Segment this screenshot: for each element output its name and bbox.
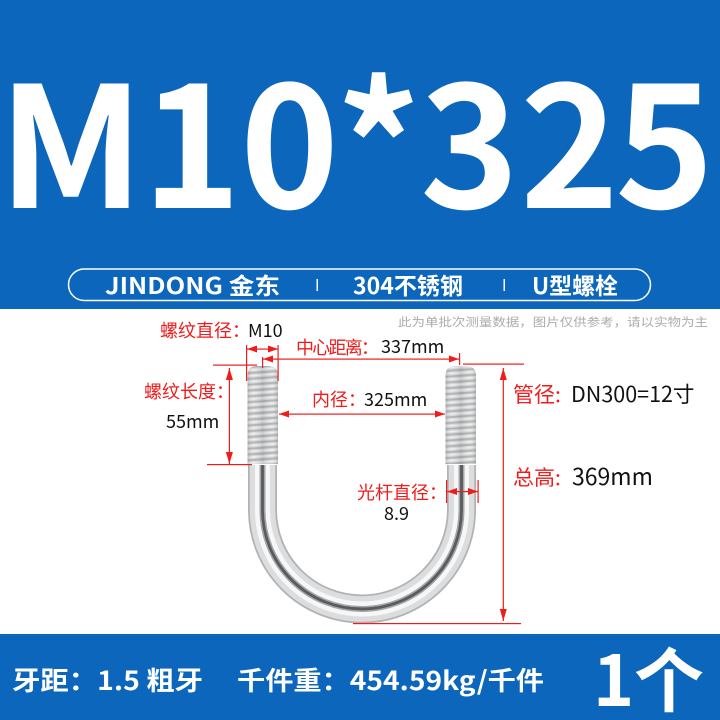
material text: 304不锈钢: [353, 267, 463, 301]
panel: brand pill bar: [68, 267, 650, 301]
title: model size: 10*325: [142, 14, 714, 257]
product type text: U型螺栓: [532, 267, 618, 301]
thread length dimension: [207, 364, 257, 465]
product image: U-bolt: [248, 366, 476, 609]
label: center distance: 中心距离：: [296, 334, 379, 360]
thread diameter dimension: [246, 345, 279, 381]
title: model size: M: [0, 14, 144, 257]
label: pipe size: [513, 378, 694, 409]
label: thread length: 55mm: [166, 408, 219, 434]
label: total height: 369mm: [572, 458, 653, 492]
label: thread diameter: M10: [248, 317, 283, 343]
weight text: 千件重：454.59kg/千件: [237, 661, 544, 698]
label: pipe size: 管径:: [513, 379, 561, 409]
total height dimension: [353, 364, 524, 624]
disclaimer note: 此为单批次测量数据，图片仅供参考，请以实物为主: [398, 314, 708, 330]
label: shank diameter: [357, 479, 447, 526]
right thread: [446, 366, 476, 464]
label: inner diameter: 内径：: [312, 386, 366, 412]
label: pipe size: DN300=12寸: [571, 378, 694, 409]
shank diameter dimension: [446, 480, 479, 503]
brand text: JINDONG 金东: [105, 267, 280, 301]
label: thread diameter: 螺纹直径：: [160, 317, 250, 343]
panel: top blue header: [0, 0, 720, 309]
label: thread length: 螺纹长度：: [144, 378, 234, 404]
label: inner diameter: 325mm: [364, 386, 427, 412]
label: inner diameter: [312, 386, 427, 412]
center distance dimension: [262, 353, 460, 368]
label: total height: 总高:: [513, 462, 561, 492]
label: center distance: 337mm: [381, 333, 444, 359]
left thread: [248, 366, 278, 464]
label: shank diameter: 光杆直径：: [357, 479, 447, 505]
inner diameter dimension: [279, 410, 445, 418]
label: center distance: [296, 333, 444, 360]
dimension lines: [207, 345, 524, 624]
label: thread length: [144, 378, 234, 434]
panel: bottom blue footer: [0, 626, 720, 720]
label: shank diameter: 8.9: [384, 500, 409, 526]
thread pitch text: 牙距：1.5 粗牙: [12, 661, 203, 698]
label: total height: [513, 458, 653, 492]
